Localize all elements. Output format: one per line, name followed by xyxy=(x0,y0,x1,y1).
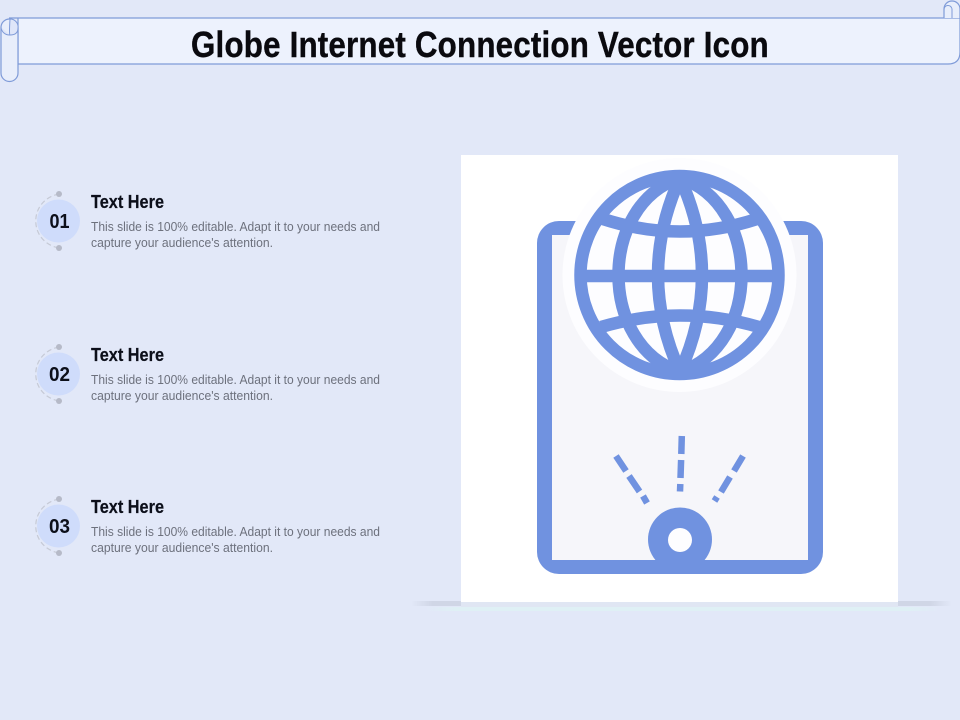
title banner scroll xyxy=(1,1,960,82)
globe halo xyxy=(562,158,796,392)
number badge 01: 01 xyxy=(50,211,70,233)
item description 01 xyxy=(91,220,380,250)
number badge 03: 03 xyxy=(49,516,70,538)
number badge 01 xyxy=(36,191,80,251)
panel shadow xyxy=(411,601,952,611)
item 01 xyxy=(36,191,380,251)
title: Globe Internet Connection Vector Icon xyxy=(191,25,769,66)
icon: globe internet connection xyxy=(537,158,823,574)
item description 03: This slide is 100% editable. Adapt it to your needs and xyxy=(91,525,380,539)
item description 01: This slide is 100% editable. Adapt it to your needs and xyxy=(91,220,380,234)
item description 03 xyxy=(91,525,380,555)
item heading 03: Text Here xyxy=(91,497,164,517)
signal emitter xyxy=(648,508,712,574)
number badge 02 xyxy=(36,344,80,404)
item 03 xyxy=(36,496,380,556)
item description 03: capture your audience's attention. xyxy=(91,541,273,555)
item description 01: capture your audience's attention. xyxy=(91,236,273,250)
item description 02: This slide is 100% editable. Adapt it to your needs and xyxy=(91,373,380,387)
item description 02 xyxy=(91,373,380,403)
device frame xyxy=(537,221,823,574)
signal dashes xyxy=(616,436,743,503)
number badge 02: 02 xyxy=(49,364,70,386)
item heading 01: Text Here xyxy=(91,192,164,212)
icon: globe xyxy=(580,176,778,374)
item heading 02: Text Here xyxy=(91,345,164,365)
panel: icon card xyxy=(461,155,898,602)
item description 02: capture your audience's attention. xyxy=(91,389,273,403)
number badge 03 xyxy=(36,496,80,556)
item 02 xyxy=(36,344,380,404)
